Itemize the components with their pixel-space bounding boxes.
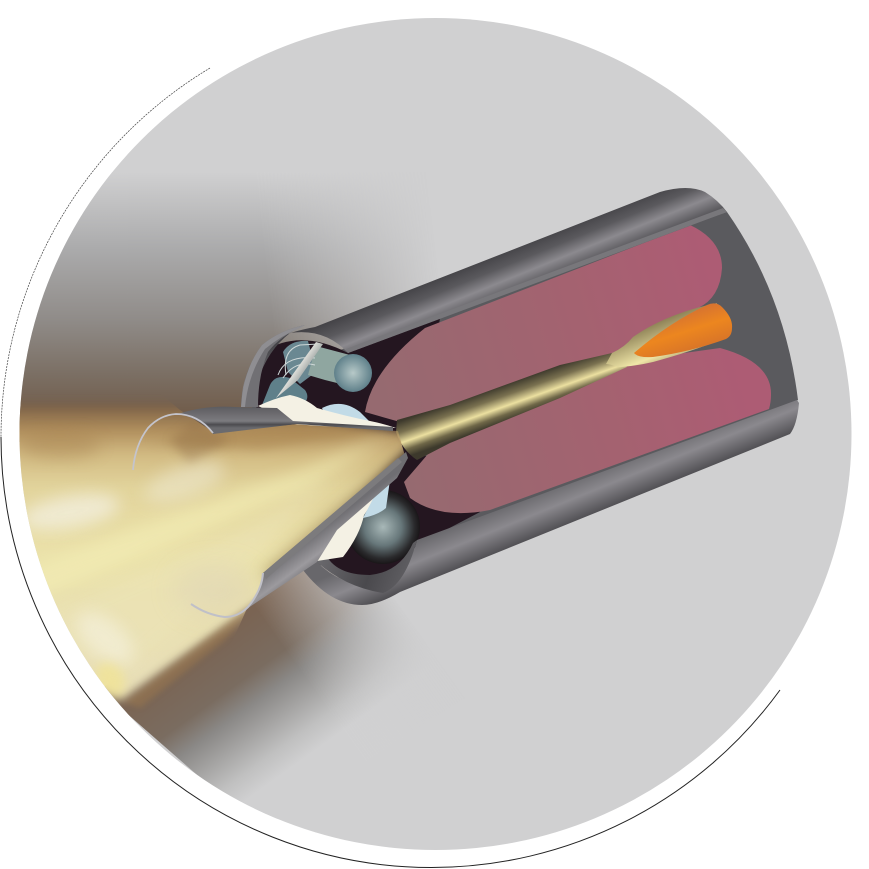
white rim arc upper xyxy=(133,414,213,470)
tube interior far wall xyxy=(250,212,798,570)
white liner upper xyxy=(258,395,396,428)
lower tube wall xyxy=(303,400,799,605)
light blue bag xyxy=(322,404,370,424)
white liner lower xyxy=(318,498,374,561)
lower cone wall xyxy=(248,452,408,608)
upper propellant lobe xyxy=(365,225,722,440)
dark chamber opening xyxy=(255,318,480,578)
white injector rod xyxy=(276,342,323,398)
plume streaks xyxy=(44,438,378,582)
combustion tube xyxy=(241,188,799,605)
light blue lower bag xyxy=(363,484,390,518)
orange tip xyxy=(634,303,732,357)
exhaust plume xyxy=(0,405,412,708)
lower sphere xyxy=(346,490,420,564)
pump hardware, upper xyxy=(262,341,372,408)
lower propellant lobe xyxy=(404,348,771,513)
smoke cloud xyxy=(20,172,416,819)
nozzle cone walls xyxy=(133,395,408,617)
white rim arc lower xyxy=(191,573,263,617)
fuel stem xyxy=(396,353,627,460)
upper cone wall xyxy=(178,407,393,434)
lower inner crescent xyxy=(317,540,417,593)
nozzle tip flare xyxy=(606,303,720,367)
tube rim left xyxy=(241,325,305,407)
upper tube wall xyxy=(241,188,727,405)
